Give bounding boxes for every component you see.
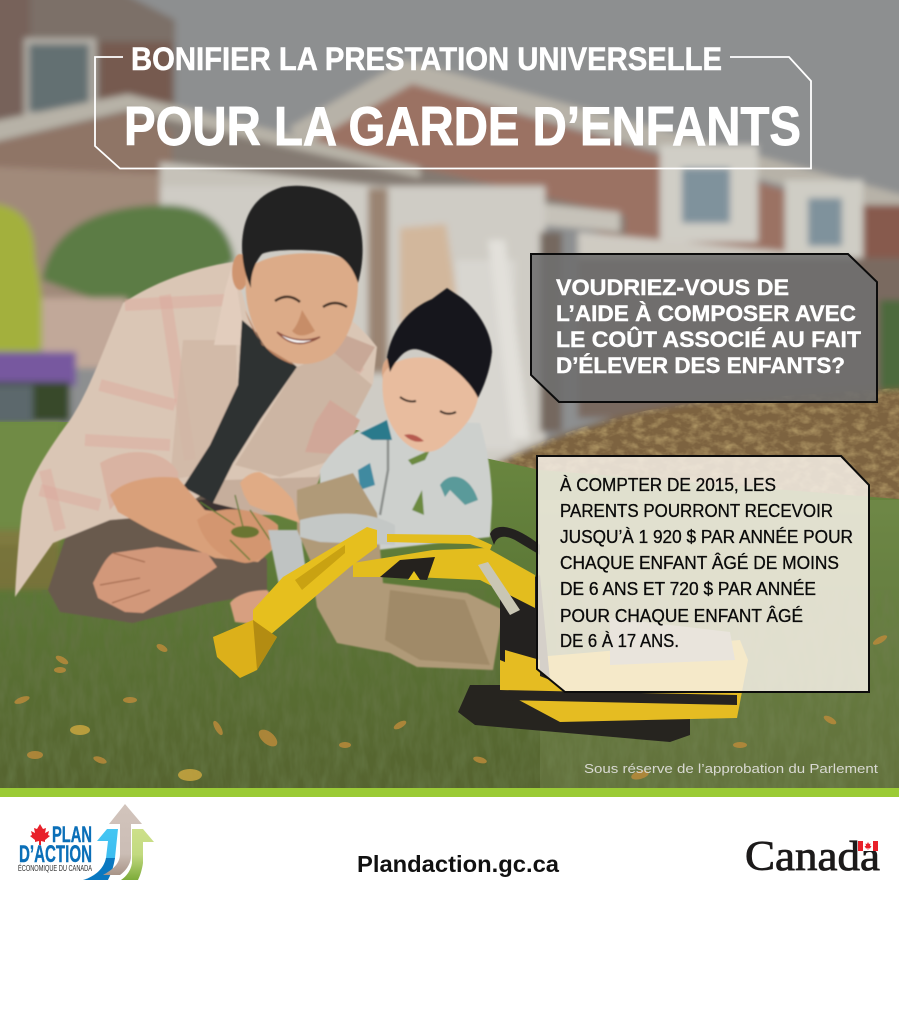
lawn [0,422,899,800]
green divider band [0,788,899,797]
callout: question [531,254,877,402]
hood collar blue [360,420,392,440]
callout: benefit amounts: PARENTS POURRONT RECEVOIR [560,501,833,521]
cab handle [490,527,540,555]
shrubs and flowers [42,205,235,305]
hands holding grass [197,509,278,563]
tan trousers [297,473,503,670]
boom [353,548,535,608]
hair [387,288,492,398]
callout: question: VOUDRIEZ-VOUS DE [556,275,789,300]
lower roof [134,114,626,234]
bucket [213,620,277,678]
icon: green arrow [121,829,154,880]
neck shade [245,310,295,365]
black decal [380,557,435,580]
heading line 2: POUR LA GARDE D’ENFANTS [124,95,801,157]
dinosaur prints [440,477,478,505]
disclaimer note: Sous réserve de l’approbation du Parlement [584,761,878,776]
son's low hand [229,589,270,624]
body [500,640,748,722]
ear [382,358,390,378]
engine grille [610,618,735,665]
callout: question: L’AIDE À COMPOSER AVEC [556,301,856,326]
gable [288,58,899,208]
callout: benefit amounts: CHAQUE ENFANT ÂGÉ DE MOINS [560,553,839,573]
logo: Plan d'action économique du Canada [18,804,154,880]
collar [214,276,240,345]
fallen leaves [13,633,888,781]
logo word D'ACTION: D’ACTION [19,841,92,868]
arm [253,527,377,635]
callout: question: LE COÛT ASSOCIÉ AU FAIT [556,327,862,352]
logo tagline: ÉCONOMIQUE DU CANADA [18,864,92,873]
logo word PLAN: PLAN [52,822,92,847]
face [382,357,480,452]
shirt shadow folds [170,340,238,480]
zipper [380,440,388,515]
finger lines [100,553,150,603]
icon: Canadian flag [858,841,878,851]
hair [242,186,363,288]
icon: blue arrow [83,829,118,880]
right shirt pocket panel [235,352,372,477]
cylinder [387,534,492,550]
callout: benefit amounts: DE 6 ANS ET 720 $ PAR ANNÉE [560,579,816,599]
callout: benefit amounts: JUSQU’À 1 920 $ PAR ANNÉE POUR [560,527,853,547]
callout: benefit amounts [537,456,869,692]
toy excavator [213,527,748,742]
icon: beige arrow [103,804,142,875]
photo: father and son playing on a lawn [0,0,899,800]
callout: question: D’ÉLEVER DES ENFANTS? [556,353,845,378]
ear [232,254,248,290]
son's hand over the grass [240,472,300,523]
nose [292,310,315,336]
son [230,288,503,670]
eyes [275,297,347,307]
father [15,186,377,623]
tracks [458,685,690,742]
dark tee [183,320,297,503]
callout: benefit amounts: POUR CHAQUE ENFANT ÂGÉ [560,606,803,626]
house background [0,0,899,530]
dinosaur hoodie [300,420,492,550]
son's arm [300,514,395,545]
sleeve cuff [100,452,178,510]
trousers [48,495,267,623]
callout: benefit amounts: DE 6 À 17 ANS. [560,631,679,651]
face [246,253,358,364]
Canada wordmark: Canada [745,834,880,880]
callout: benefit amounts: À COMPTER DE 2015, LES [560,475,776,495]
website address: Plandaction.gc.ca [357,851,559,877]
heading line 1: BONIFIER LA PRESTATION UNIVERSELLE [131,41,722,77]
cab [500,575,550,680]
plaid shirt [15,262,377,597]
smile [277,332,320,343]
forearm [110,477,278,562]
leaf pile texture [500,388,899,499]
shoe behind the arm [268,529,306,583]
eyes and mouth [400,397,456,414]
headline frame [95,57,811,168]
shirt plaid pink bands [40,295,360,530]
icon: maple leaf [30,824,50,845]
shirt hem behind the hands [212,473,321,516]
lower hand [93,547,217,613]
